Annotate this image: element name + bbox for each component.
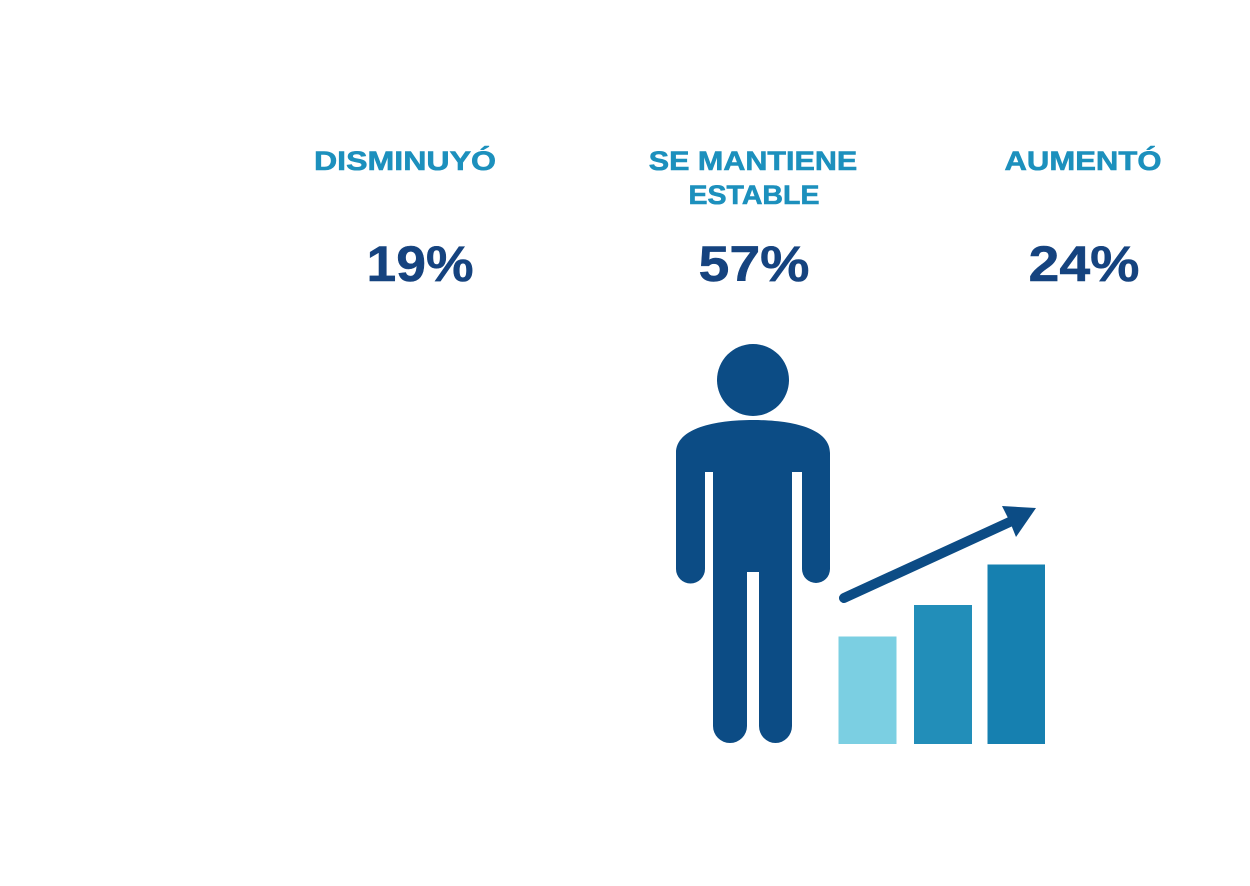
heading: aumentó: AUMENTÓ <box>1005 146 1161 176</box>
icon: growth arrow <box>844 506 1036 598</box>
heading: se mantiene estable: ESTABLE <box>688 180 819 210</box>
heading: disminuyó: DISMINUYÓ <box>314 146 496 176</box>
icon: person <box>676 344 830 743</box>
heading: se mantiene estable <box>649 146 857 210</box>
value: 24%: 24% <box>1028 236 1139 292</box>
value: 57%: 57% <box>698 236 809 292</box>
heading: se mantiene estable: SE MANTIENE <box>649 146 857 176</box>
bar chart <box>838 564 1045 744</box>
value: 19%: 19% <box>366 236 473 292</box>
